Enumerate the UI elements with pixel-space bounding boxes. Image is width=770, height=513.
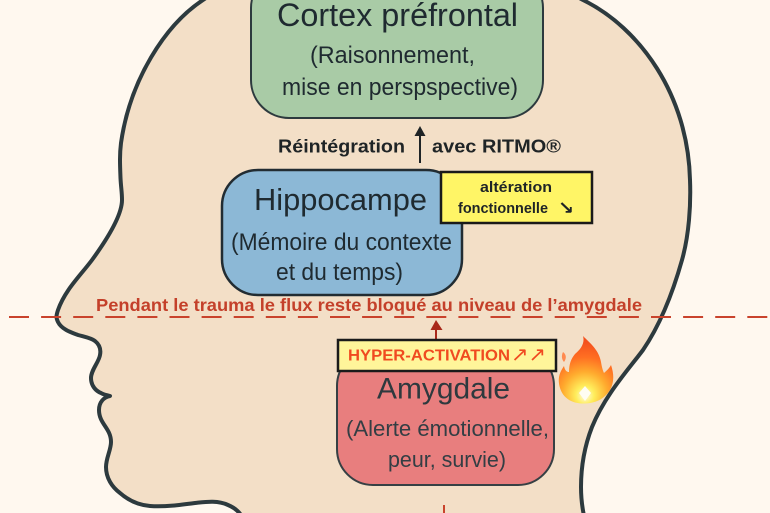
- label: réintégration avec RITMO: [278, 136, 561, 156]
- text: et du temps: et du temps): [276, 259, 403, 286]
- label: réintégration avec RITMO: Réintégration: [278, 136, 405, 156]
- callout: altération fonctionnelle: altération: [480, 179, 552, 196]
- text: alerte émotionnelle: (Alerte émotionnelle,: [346, 416, 549, 441]
- icon: flame: [559, 336, 613, 404]
- panel: hippocampe: [222, 170, 462, 295]
- panel: amygdale: [337, 350, 554, 485]
- heading: hippocampe: Hippocampe: [254, 183, 427, 217]
- callout: altération fonctionnelle: ↘: [558, 198, 574, 218]
- text: blocage pendant le trauma: Pendant le trauma le flux reste bloqué au niveau de l’amygdale: [96, 295, 642, 315]
- arrow: base vers amygdale: [443, 505, 445, 513]
- dashed line: limite du flux: [9, 316, 770, 318]
- text: peur, survie: peur, survie): [388, 447, 506, 472]
- callout: altération fonctionnelle: [441, 172, 592, 223]
- text: raisonnement: (Raisonnement,: [310, 42, 475, 69]
- label: réintégration avec RITMO: avec RITMO®: [432, 136, 561, 156]
- panel: cortex préfrontal: [251, 0, 543, 118]
- arrow: up to cortex: [414, 126, 426, 163]
- heading: amygdale: Amygdale: [377, 372, 510, 406]
- arrow: amygdale vers le haut: [430, 320, 442, 340]
- text: mémoire du contexte: (Mémoire du contexte: [231, 229, 452, 256]
- text: mise en perspective: mise en perspspective): [282, 74, 518, 101]
- callout: altération fonctionnelle: fonctionnelle: [458, 200, 548, 217]
- callout: hyper-activation: [338, 340, 556, 371]
- callout: hyper-activation: ↗↗: [511, 344, 546, 366]
- callout: hyper-activation: HYPER-ACTIVATION: [348, 348, 510, 364]
